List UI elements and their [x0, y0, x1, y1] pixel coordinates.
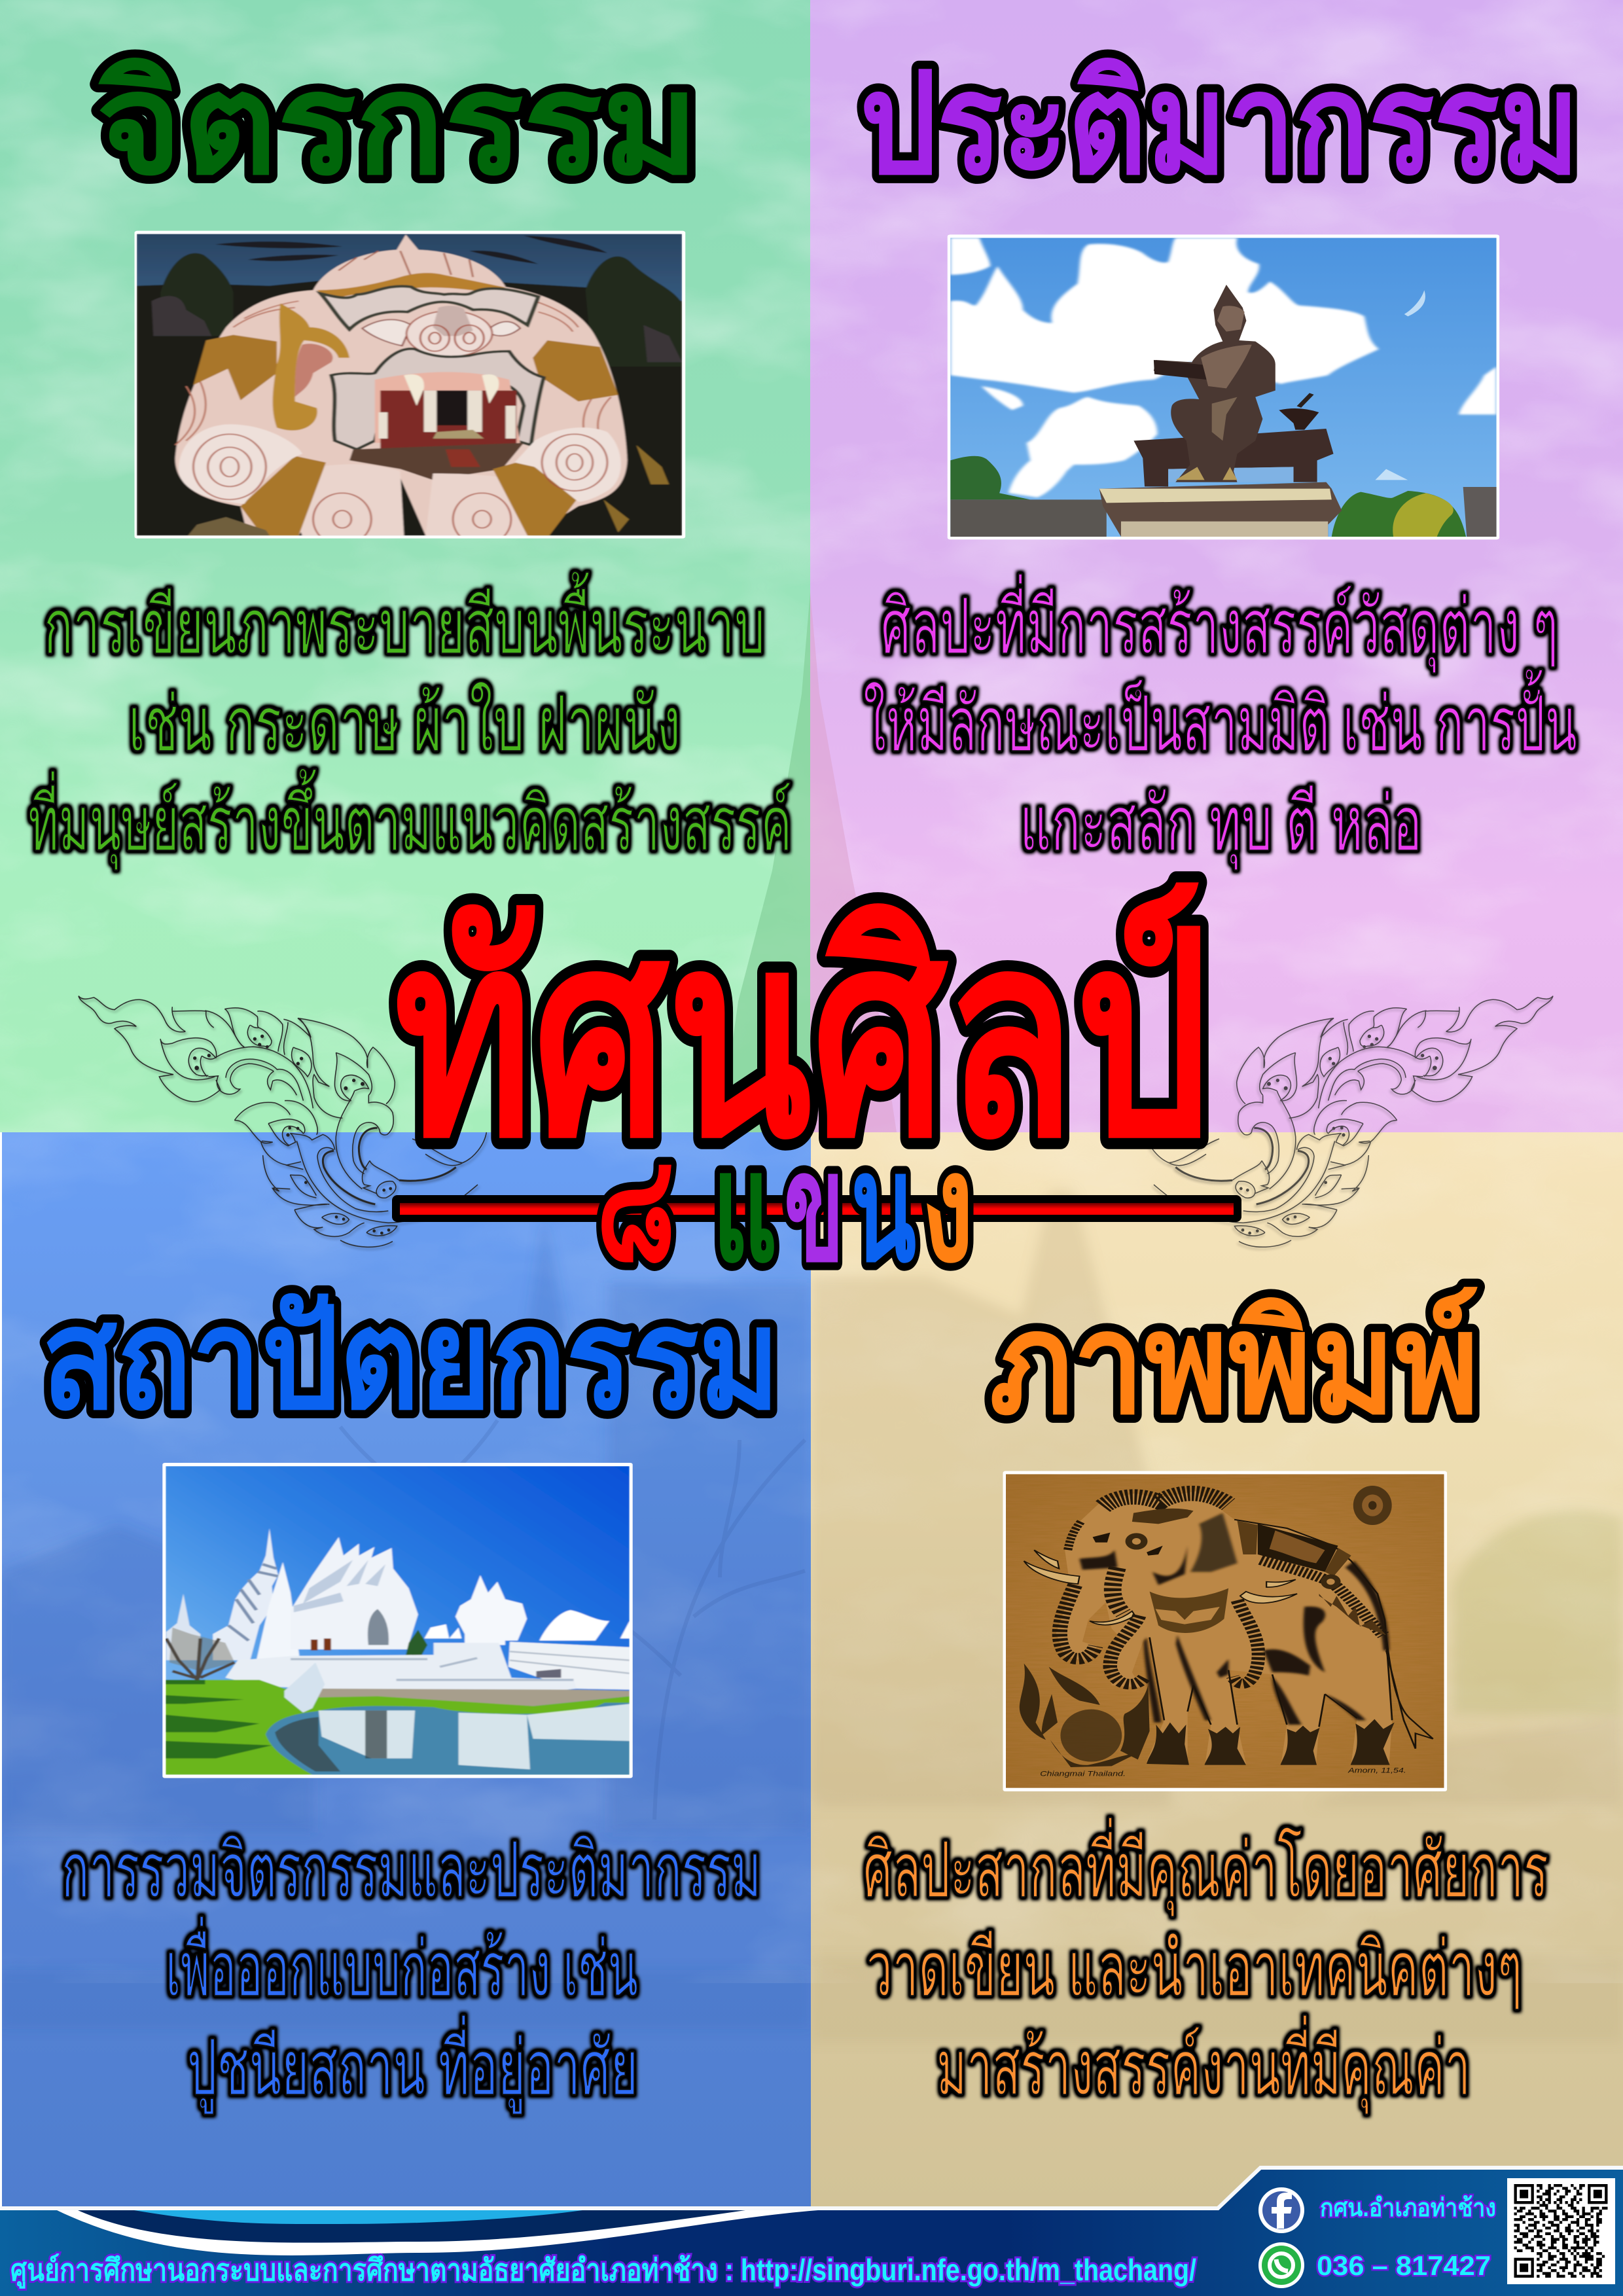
- footer band: [0, 2166, 1623, 2296]
- text: painting description: ที่มนุษย์สร้างขึ้นตามแนวคิดสร้างสรรค์: [28, 768, 792, 871]
- image: elephant print: [1003, 1471, 1447, 1791]
- image: statue of seated king: [948, 234, 1500, 539]
- heading: ภาพพิมพ์: ภาพพิมพ์: [990, 1285, 1479, 1443]
- panel: sculpture quadrant background: [810, 0, 1623, 1132]
- subtitle: ๘ แขนง: น: [851, 1124, 916, 1292]
- text: architecture description: [62, 1827, 761, 2115]
- text: painting description: เช่น กระดาษ ผ้าใบ ฝาผนัง: [128, 681, 681, 768]
- image: Thai mural painting of giant: [135, 230, 686, 539]
- footer swoosh: [57, 2210, 818, 2255]
- icon: QR code: [1507, 2178, 1615, 2284]
- panel: painting quadrant background: [0, 0, 810, 1132]
- ornament left: [78, 996, 490, 1251]
- icon: facebook: [1258, 2187, 1304, 2233]
- image: elephant print: Chiangmai Thailand.: [1040, 1770, 1126, 1778]
- heading: จิตรกรรม: จิตรกรรม: [96, 45, 699, 203]
- text: painting description: การเขียนภาพระบายสีบนพื้นระนาบ: [44, 571, 765, 670]
- subtitle: ๘ แขนง: [597, 1124, 974, 1292]
- panel: printmaking quadrant background: [811, 1132, 1623, 2209]
- footer text: facebook name: กศน.อำเภอท่าช้าง: [1320, 2195, 1496, 2222]
- subtitle: ๘ แขนง: ง: [921, 1124, 974, 1292]
- footer text: phone: 036 – 817427: [1317, 2250, 1491, 2281]
- subtitle: ๘ แขนง: แ: [712, 1124, 777, 1292]
- decorative Thai kanok ornaments: [79, 996, 1553, 1247]
- image: elephant print: Amorn, 11,54.: [1347, 1767, 1406, 1774]
- text: sculpture description: [863, 573, 1577, 871]
- subtitle: ๘ แขนง: ข: [784, 1124, 844, 1292]
- text: architecture description: การรวมจิตรกรรมและประติมากรรม: [62, 1827, 761, 1914]
- panel: architecture quadrant background: [0, 1132, 811, 2209]
- ornament right: [1145, 996, 1553, 1247]
- text: architecture description: ปูชนียสถาน ที่อยู่อาศัย: [187, 2015, 638, 2115]
- subtitle: ๘ แขนง: ๘: [597, 1124, 675, 1292]
- divider bar under main title: [392, 1195, 1241, 1222]
- image: white temple: [162, 1463, 633, 1778]
- text: printmaking description: [863, 1817, 1548, 2115]
- text: painting description: [28, 571, 792, 871]
- text: architecture description: เพื่อออกแบบก่อสร้าง เช่น: [166, 1916, 638, 2013]
- main title: ทัศนศิลป์: ทัศนศิลป์: [394, 878, 1209, 1194]
- heading: สถาปัตยกรรม: สถาปัตยกรรม: [42, 1280, 780, 1438]
- footer text: website: ศูนย์การศึกษานอกระบบและการศึกษาตามอัธยาศัยอำเภอท่าช้าง : http://singburi.nfe.go.th/m_thachang/: [10, 2253, 1196, 2289]
- icon: whatsapp: [1258, 2242, 1304, 2288]
